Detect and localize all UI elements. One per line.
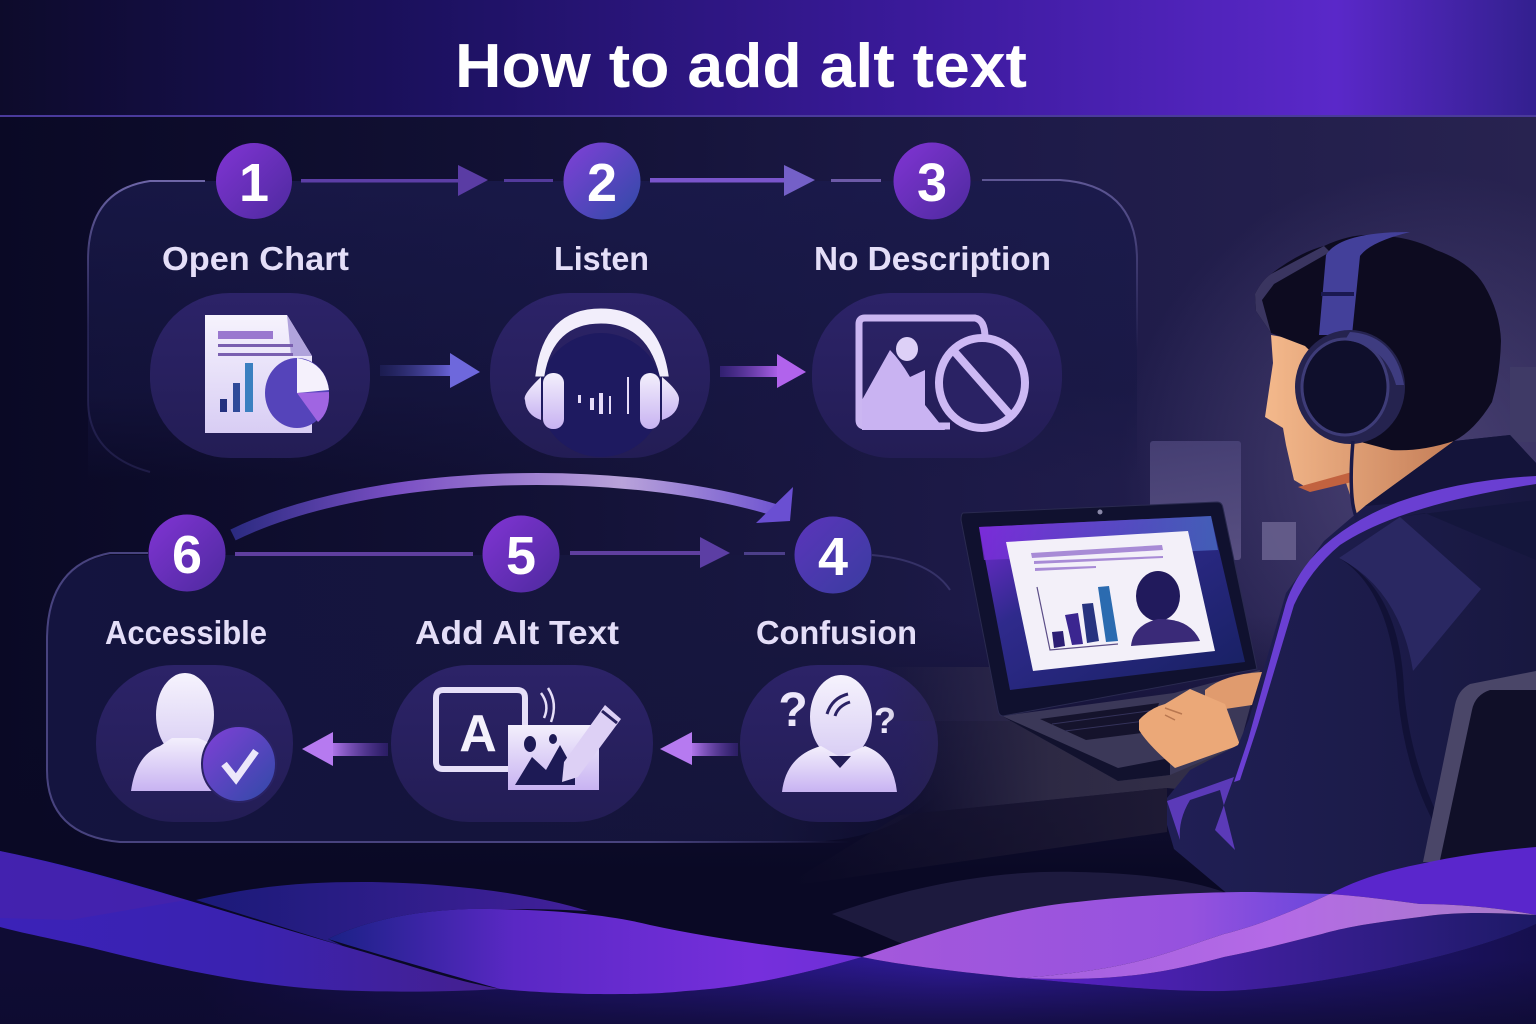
left ribbon <box>0 851 500 992</box>
jacket <box>1167 435 1536 896</box>
title: How to add alt text <box>455 32 1027 101</box>
laptop <box>961 502 1260 781</box>
slide person <box>1131 571 1200 646</box>
connector 2 to 3 <box>650 165 881 196</box>
slide on screen <box>1006 531 1215 671</box>
icon: confused person: ? <box>874 700 896 741</box>
laptop lid <box>961 502 1257 716</box>
panel: bottom row <box>47 553 950 842</box>
step 6 number <box>148 514 226 592</box>
icon: headphones <box>490 293 710 458</box>
arrow: listen to no description <box>720 354 806 388</box>
lower right ribbon <box>1019 913 1536 991</box>
laptop keyboard <box>1040 703 1159 740</box>
person <box>1139 232 1536 896</box>
step 4 number: 4 <box>818 527 848 587</box>
step 2 number <box>564 142 640 220</box>
hair highlight <box>1255 246 1330 333</box>
icon: add alt text: A <box>459 705 497 763</box>
laptop base <box>1002 670 1260 781</box>
step 5 number <box>482 516 560 592</box>
headphone cup <box>1295 330 1405 444</box>
icon: image with no-description symbol <box>812 293 1062 458</box>
sea <box>0 924 1536 1024</box>
back dark wave <box>196 882 588 946</box>
label: Listen: Listen <box>554 240 649 277</box>
panel: top row <box>88 180 1137 480</box>
front hand <box>1139 689 1240 768</box>
arrow: chart to listen <box>380 353 480 388</box>
icon: add alt text <box>391 665 653 822</box>
back hand <box>1205 672 1262 712</box>
bottom waves <box>0 847 1536 1024</box>
step 3 number <box>894 142 970 220</box>
laptop screen <box>979 516 1245 690</box>
right purple crest <box>1330 847 1536 915</box>
icon: accessible person with check <box>96 665 293 822</box>
center ribbon <box>328 909 862 994</box>
label: Open Chart: Open Chart <box>162 240 349 277</box>
step 1 number: 1 <box>239 153 269 213</box>
arrow: add alt text to accessible <box>302 732 388 766</box>
step 6 number: 6 <box>172 525 202 585</box>
step 4 number <box>794 516 872 594</box>
arrow: confusion to add alt text <box>660 732 738 765</box>
headphone band <box>1319 232 1410 335</box>
step 1 number <box>216 143 292 219</box>
icon: confused person: ? <box>778 684 808 737</box>
label: Accessible: Accessible <box>105 614 267 651</box>
curved return arrow <box>233 479 793 535</box>
lilac ribbon <box>862 892 1330 978</box>
label: No Description: No Description <box>814 240 1051 277</box>
label: Add Alt Text: Add Alt Text <box>415 614 619 651</box>
jacket shoulder shading <box>1339 500 1536 827</box>
step 3 number: 3 <box>917 153 947 213</box>
step 2 number: 2 <box>587 153 617 213</box>
back grey wave <box>832 872 1224 945</box>
step 5 number: 5 <box>506 526 536 586</box>
bright lilac ribbon <box>1019 894 1536 979</box>
hair <box>1255 235 1501 450</box>
slide text lines <box>1031 545 1163 571</box>
jacket hood <box>1365 435 1536 506</box>
icon: confused person <box>740 665 938 822</box>
screen top glow <box>979 516 1218 560</box>
label: Confusion: Confusion <box>756 614 917 651</box>
connector 6 to 5 <box>235 552 473 556</box>
headphone cable <box>1351 441 1357 519</box>
icon: open chart document <box>150 293 370 458</box>
desk <box>783 667 1240 887</box>
jacket purple edge <box>1234 476 1536 782</box>
background scene blocks <box>1150 367 1536 560</box>
connector 1 to 2 <box>301 165 553 196</box>
header band <box>0 0 1536 117</box>
connector 5 to 4 <box>570 537 785 568</box>
slide bar chart <box>1037 586 1118 650</box>
face and neck <box>1265 335 1454 515</box>
sleeve cuff highlight <box>1167 777 1235 850</box>
chair <box>1423 671 1536 862</box>
